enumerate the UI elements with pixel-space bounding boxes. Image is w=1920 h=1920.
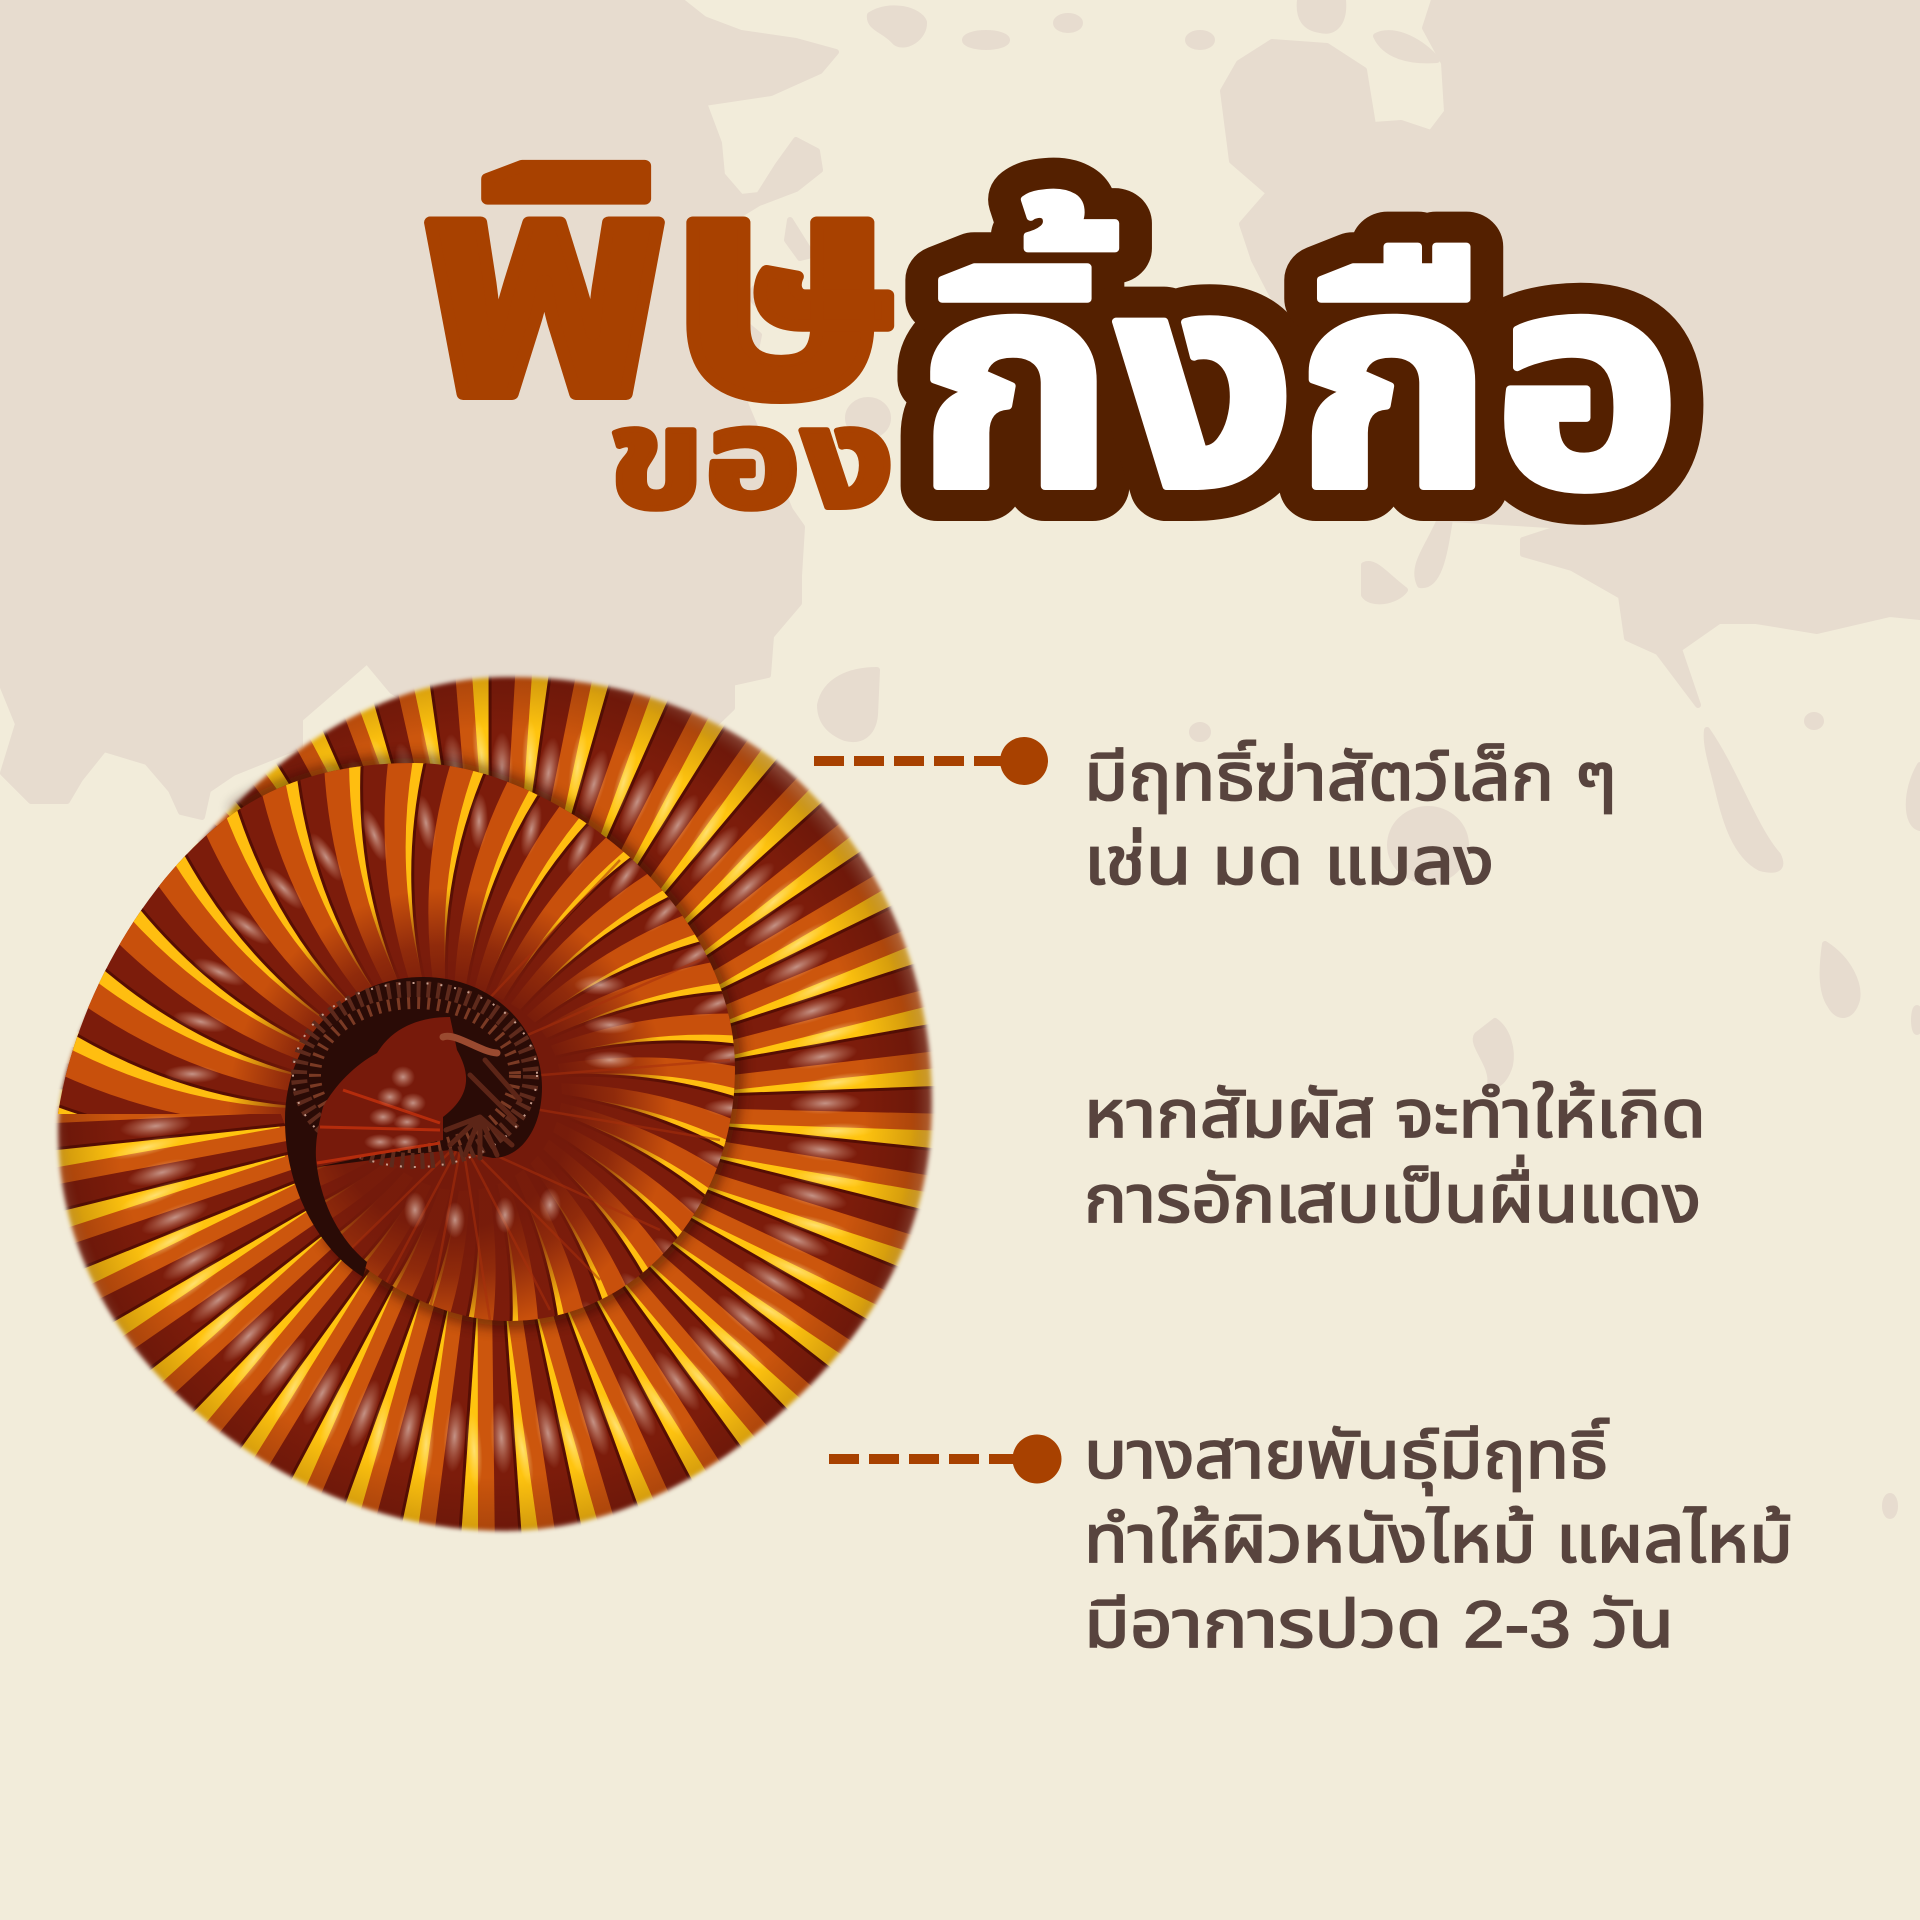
shadow under the inner coil [234, 763, 735, 1321]
outer coil of the body [54, 674, 936, 1534]
text block: second point: หากสัมผัส จะทำให้เกิด [1084, 1077, 1706, 1151]
legs ring around the centre [285, 977, 542, 1277]
head segments [316, 1017, 520, 1167]
bristles of the legs [293, 983, 537, 1167]
text block: second point [1084, 1077, 1706, 1236]
illustration: coiled millipede [54, 674, 936, 1534]
text block: first point: เช่น มด แมลง [1084, 824, 1494, 898]
text block: third point: บางสายพันธุ์มีฤทธิ์ [1084, 1418, 1609, 1495]
text block: third point: มีอาการปวด 2-3 วัน [1084, 1587, 1674, 1661]
background stain blobs [0, 0, 1920, 1516]
title word: ของ: ของ [608, 380, 894, 537]
text block: second point: การอักเสบเป็นผื่นแดง [1084, 1155, 1701, 1236]
text block: third point [1084, 1418, 1793, 1661]
title word: กิ้งกือ: กิ้งกือ [917, 190, 1681, 550]
title word: พิษ: พิษ [420, 112, 900, 461]
callout: connector to first text [814, 737, 1048, 785]
title: พิษ ของ กิ้งกือ [420, 112, 1681, 550]
title word: กิ้งกือ: กิ้งกือ [917, 190, 1681, 550]
text block: third point: ทำให้ผิวหนังไหม้ แผลไหม้ [1084, 1502, 1793, 1576]
text block: first point [1084, 740, 1617, 898]
callout: connector to third text [829, 1434, 1062, 1484]
text block: first point: มีฤทธิ์ฆ่าสัตว์เล็ก ๆ [1084, 740, 1617, 814]
inner coil of the body [58, 763, 735, 1321]
